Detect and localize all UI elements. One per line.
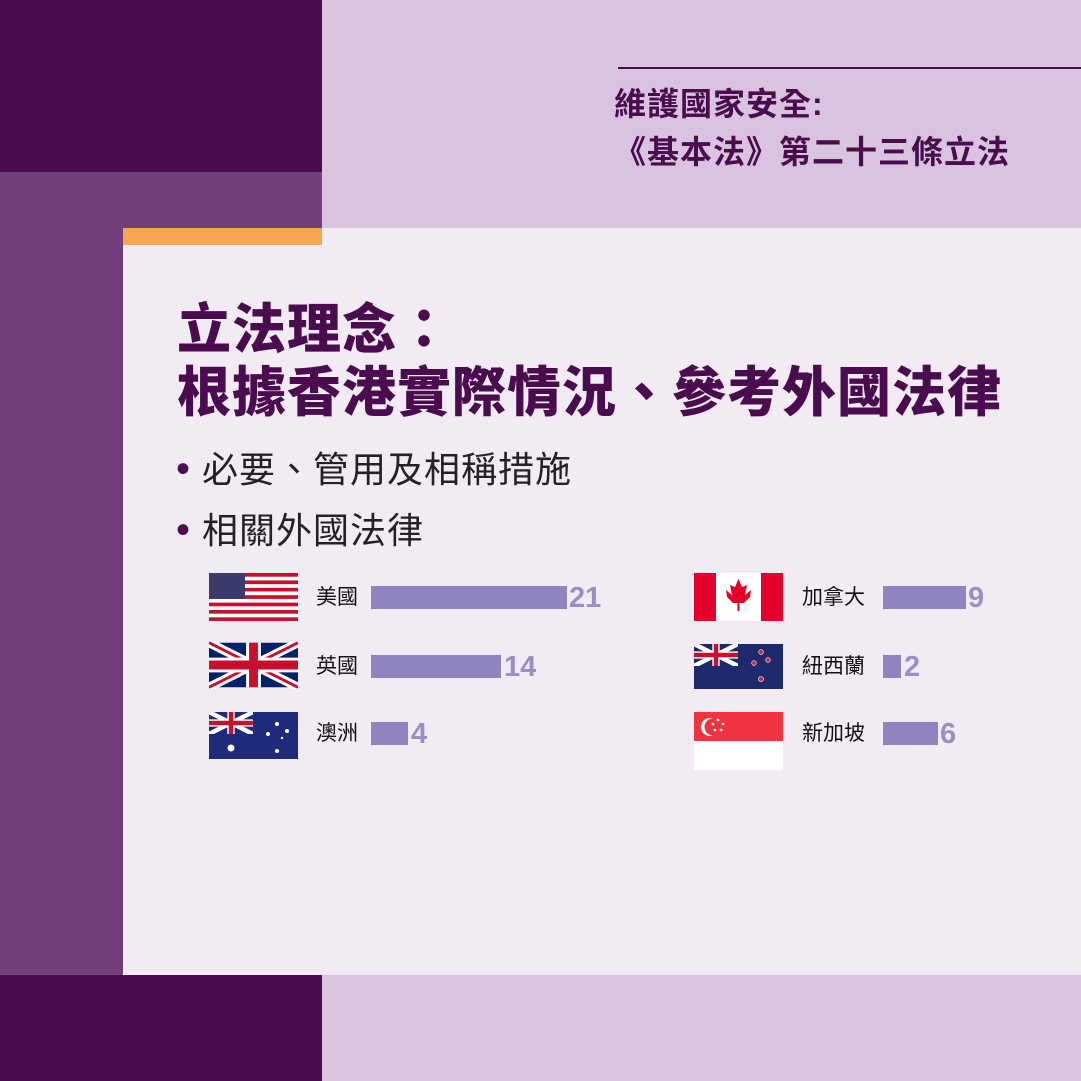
row: USA <box>316 582 601 614</box>
title: 立法理念： <box>177 300 452 360</box>
header text <box>614 86 1010 170</box>
text: 14 <box>504 651 536 683</box>
row: Canada <box>802 582 984 614</box>
row: New Zealand <box>802 651 920 683</box>
text: 4 <box>411 718 427 750</box>
text: 英國 <box>316 655 358 678</box>
text: 2 <box>904 651 920 683</box>
title <box>177 300 1002 423</box>
flag: UK <box>209 641 298 689</box>
text: 紐西蘭 <box>802 655 865 678</box>
text: 澳洲 <box>316 722 358 745</box>
background: top-left dark block <box>0 0 322 172</box>
row: Australia <box>316 718 427 750</box>
flag: Australia <box>209 712 298 759</box>
bullet list: • 相關外國法律 <box>176 508 424 552</box>
orange accent bar <box>123 228 322 245</box>
header text: 《基本法》第二十三條立法 <box>614 134 1010 170</box>
header rule <box>618 67 1081 69</box>
bullet list <box>176 447 572 552</box>
background: bottom-left dark block <box>0 975 322 1081</box>
background: left medium strip <box>0 172 322 228</box>
text: 9 <box>968 582 984 614</box>
header text: 維護國家安全: <box>614 86 824 122</box>
text: 加拿大 <box>802 586 865 609</box>
flag: USA <box>209 573 298 621</box>
text: 美國 <box>316 586 358 609</box>
text: 新加坡 <box>802 722 865 745</box>
title: 根據香港實際情況、參考外國法律 <box>177 363 1002 423</box>
row: UK <box>316 651 536 683</box>
flag: New Zealand <box>694 644 783 689</box>
bullet list: • 必要、管用及相稱措施 <box>176 447 572 491</box>
text: 6 <box>940 718 956 750</box>
flag: Singapore <box>694 712 783 770</box>
background: top-right lavender <box>322 0 1081 228</box>
flag: Canada <box>694 573 783 621</box>
background: bottom-right lavender <box>322 975 1081 1081</box>
text: 21 <box>569 582 601 614</box>
row: Singapore <box>802 718 956 750</box>
